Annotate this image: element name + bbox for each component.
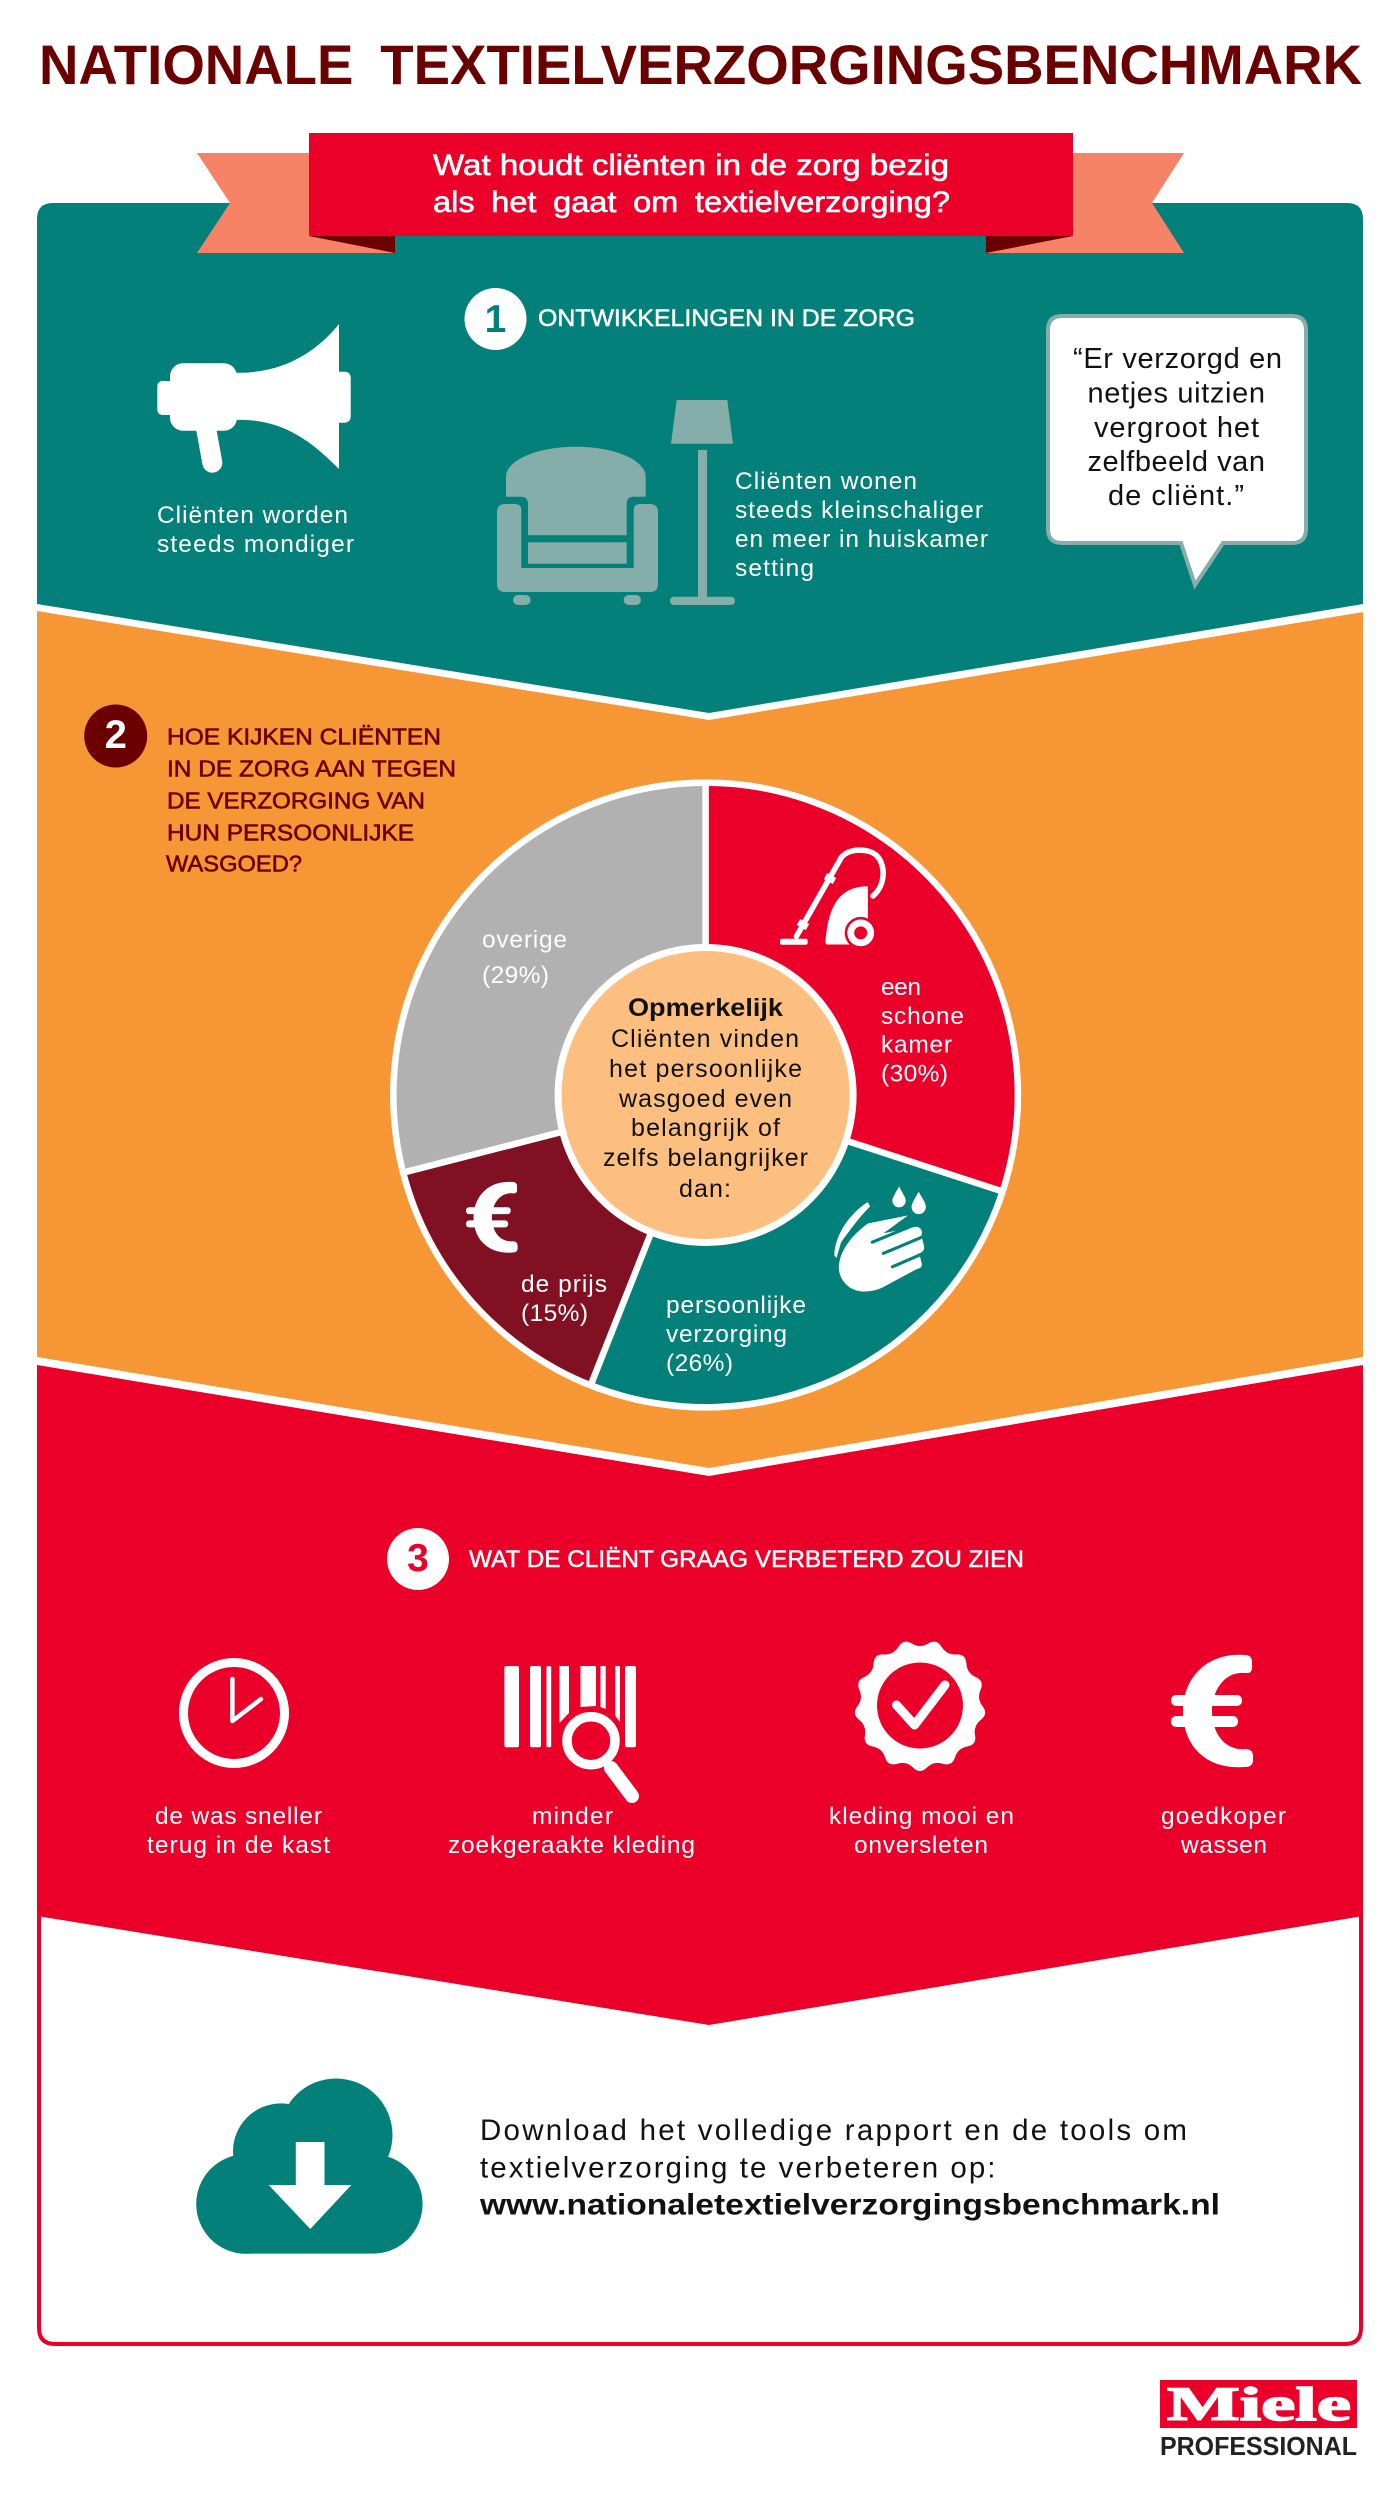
heading: section 2: 2 bbox=[105, 713, 127, 757]
panel: download section frame bbox=[39, 1914, 1361, 2344]
text: centre of donut: Cliënten vinden bbox=[611, 1025, 799, 1053]
callout: quote speech bubble: de cliënt.” bbox=[1108, 480, 1244, 512]
text: download call to action bbox=[479, 2114, 1220, 2222]
panel: section 1 developments background bbox=[37, 203, 1363, 713]
text: download call to action: textielverzorging te verbeteren op: bbox=[480, 2152, 996, 2184]
icon: armchair and floor lamp bbox=[497, 400, 735, 605]
heading: section 3: 3 bbox=[407, 1537, 429, 1580]
panel: section 3 improvements background bbox=[37, 1365, 1363, 2025]
text: centre of donut: belangrijk of bbox=[631, 1114, 780, 1142]
label: overige bbox=[482, 927, 567, 989]
text: download call to action: Download het volledige rapport en de tools om bbox=[480, 2114, 1187, 2147]
text: small-scale living bbox=[735, 468, 988, 582]
panel: section 2 client view background bbox=[37, 611, 1363, 1468]
text: less lost clothing: zoekgeraakte kleding bbox=[448, 1832, 695, 1859]
banner text: Wat houdt cliënten in de zorg bezig bbox=[433, 149, 949, 182]
text: centre of donut: Opmerkelijk bbox=[628, 994, 783, 1022]
icon: download cloud bbox=[196, 2078, 423, 2254]
text: download call to action: www.nationaletextielverzorgingsbenchmark.nl bbox=[479, 2188, 1220, 2222]
text: clothes nice and not worn: onversleten bbox=[854, 1832, 988, 1859]
label: een schone kamer: (30%) bbox=[881, 1060, 948, 1088]
label: een schone kamer: kamer bbox=[881, 1032, 952, 1058]
label: persoonlijke verzorging: verzorging bbox=[666, 1321, 787, 1348]
heading: section 2: DE VERZORGING VAN bbox=[167, 788, 425, 814]
text: centre of donut: dan: bbox=[679, 1175, 731, 1203]
logo: Miele Professional: PROFESSIONAL bbox=[1160, 2431, 1357, 2461]
callout: quote speech bubble: “Er verzorgd en bbox=[1073, 343, 1282, 375]
title: NATIONALE TEXTIELVERZORGINGSBENCHMARK bbox=[39, 33, 1362, 96]
banner text: als het gaat om textielverzorging? bbox=[433, 186, 950, 219]
text: laundry back faster: terug in de kast bbox=[147, 1832, 330, 1859]
text: clothes nice and not worn: kleding mooi en bbox=[829, 1803, 1014, 1830]
heading: section 1 bbox=[464, 288, 915, 350]
text: small-scale living: steeds kleinschaliger bbox=[735, 497, 983, 524]
icon: vacuum cleaner bbox=[780, 850, 883, 949]
text: clients more assertive: Cliënten worden bbox=[157, 502, 348, 529]
label: persoonlijke verzorging: (26%) bbox=[666, 1350, 733, 1377]
callout: quote speech bubble: zelfbeeld van bbox=[1088, 446, 1265, 478]
label: overige: (29%) bbox=[482, 962, 549, 989]
logo: Miele Professional: Miele bbox=[1167, 2378, 1351, 2431]
banner ribbon bbox=[197, 133, 1184, 253]
text: less lost clothing bbox=[448, 1803, 695, 1859]
label: overige: overige bbox=[482, 927, 567, 954]
text: clients more assertive bbox=[157, 502, 354, 558]
heading: section 2 bbox=[84, 704, 456, 877]
text: clothes nice and not worn bbox=[829, 1803, 1014, 1859]
label: een schone kamer: schone bbox=[881, 1003, 964, 1030]
heading: section 3: WAT DE CLIËNT GRAAG VERBETERD ZOU ZIEN bbox=[469, 1546, 1024, 1573]
segment: persoonlijke verzorging 26% bbox=[592, 1095, 1000, 1404]
icon: quality badge with check bbox=[855, 1642, 985, 1771]
icon: clock bbox=[184, 1662, 284, 1764]
text: small-scale living: en meer in huiskamer bbox=[735, 526, 988, 553]
logo: Miele Professional bbox=[1160, 2378, 1357, 2461]
banner text bbox=[433, 149, 950, 219]
label: de prijs: de prijs bbox=[521, 1271, 607, 1298]
label: de prijs bbox=[521, 1271, 607, 1327]
text: small-scale living: Cliënten wonen bbox=[735, 468, 917, 495]
callout: quote speech bubble: vergroot het bbox=[1094, 412, 1259, 444]
heading: section 3 bbox=[387, 1528, 1024, 1590]
heading: section 2: WASGOED? bbox=[166, 851, 302, 877]
text: cheaper washing bbox=[1161, 1803, 1286, 1859]
text: centre of donut: wasgoed even bbox=[618, 1085, 792, 1113]
callout: quote speech bubble bbox=[1048, 316, 1306, 585]
heading: section 2: HOE KIJKEN CLIËNTEN bbox=[167, 724, 441, 750]
text: small-scale living: setting bbox=[735, 555, 814, 582]
heading: section 2: IN DE ZORG AAN TEGEN bbox=[167, 756, 456, 782]
label: persoonlijke verzorging bbox=[666, 1292, 806, 1377]
text: laundry back faster: de was sneller bbox=[155, 1803, 322, 1830]
text: centre of donut: het persoonlijke bbox=[609, 1055, 802, 1083]
text: less lost clothing: minder bbox=[532, 1803, 613, 1830]
segment: overige 29% bbox=[397, 786, 706, 1172]
text: cheaper washing: goedkoper bbox=[1161, 1803, 1286, 1830]
heading: section 1: ONTWIKKELINGEN IN DE ZORG bbox=[538, 305, 915, 332]
label: een schone kamer bbox=[881, 974, 964, 1088]
label: een schone kamer: een bbox=[881, 974, 921, 1001]
icon: barcode with magnifier bbox=[504, 1666, 636, 1796]
callout: quote speech bubble: netjes uitzien bbox=[1088, 378, 1265, 410]
text: centre of donut bbox=[603, 994, 808, 1203]
heading: section 2: HUN PERSOONLIJKE bbox=[167, 820, 414, 846]
icon: megaphone bbox=[157, 324, 351, 469]
label: persoonlijke verzorging: persoonlijke bbox=[666, 1292, 806, 1319]
text: clients more assertive: steeds mondiger bbox=[157, 531, 354, 558]
donut chart bbox=[390, 779, 1021, 1411]
icon: euro bbox=[1171, 1655, 1253, 1767]
heading: section 1: 1 bbox=[485, 298, 506, 341]
text: laundry back faster bbox=[147, 1803, 330, 1859]
segment: de prijs 15% bbox=[406, 1095, 706, 1382]
segment: een schone kamer 30% bbox=[706, 786, 1015, 1190]
icon: washing hands bbox=[834, 1186, 926, 1292]
label: de prijs: (15%) bbox=[521, 1300, 588, 1327]
icon: euro in donut bbox=[466, 1182, 518, 1253]
text: cheaper washing: wassen bbox=[1180, 1832, 1267, 1859]
text: centre of donut: zelfs belangrijker bbox=[603, 1144, 808, 1172]
